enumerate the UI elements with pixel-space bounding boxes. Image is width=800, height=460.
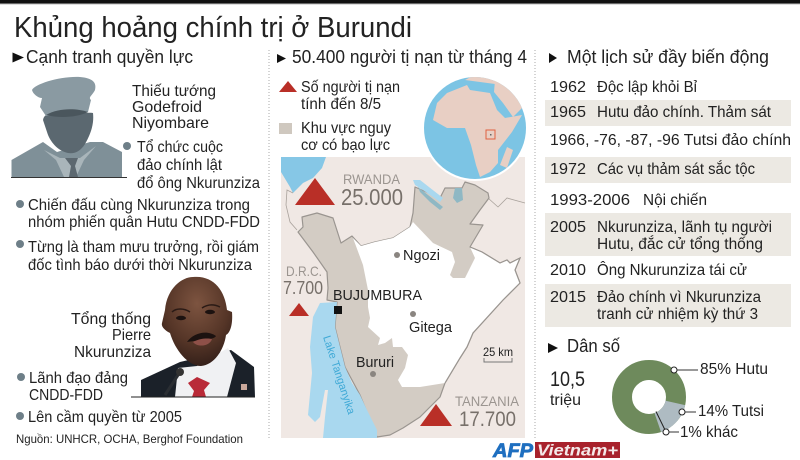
- timeline: 2005: [545, 213, 791, 256]
- timeline: 2015: [545, 284, 791, 327]
- timeline: 1993-2006: Nội chiến: [643, 192, 707, 209]
- timeline: 1993-2006: [550, 192, 707, 209]
- marker: Tanzania refugees: [420, 393, 520, 431]
- text: president name: [71, 310, 151, 361]
- text: party leader: [17, 370, 128, 404]
- text: coup organiser: đảo chính lật: [137, 157, 223, 174]
- text: party leader: CNDD-FDD: [29, 387, 103, 404]
- legend: refugee triangle: Số người tị nạn: [301, 79, 400, 96]
- text: fought with Nkurunziza: [16, 197, 260, 231]
- panel: population: [548, 335, 768, 441]
- locator globe: [422, 72, 530, 181]
- city: Bururi: Bururi: [356, 354, 394, 371]
- callout: other: 1% khác: [680, 424, 738, 441]
- timeline: 1962: [550, 79, 697, 96]
- callout: Hutu: [671, 361, 768, 378]
- city: Bujumbura: BUJUMBURA: [333, 287, 422, 304]
- text: Godefroid Niyombare name: [132, 83, 216, 132]
- photo: president Nkurunziza: [131, 277, 255, 397]
- stat: 10.5 million: [550, 368, 585, 409]
- city: Ngozi: Ngozi: [403, 247, 440, 264]
- icon: soldier silhouette: [11, 77, 127, 178]
- stat: 10.5 million: triệu: [550, 392, 581, 409]
- timeline: 2005: 2005: [550, 219, 586, 236]
- marker: DRC refugees: [283, 263, 323, 316]
- timeline: 1993-2006: 1993-2006: [550, 192, 630, 209]
- text: president name: Nkurunziza: [74, 344, 151, 361]
- timeline: 1972: Các vụ thảm sát sắc tộc: [597, 159, 755, 178]
- legend: refugee triangle: tính đến 8/5: [301, 96, 381, 113]
- text: president name: Tổng thống: [71, 310, 151, 328]
- heading: population: Dân số: [567, 335, 620, 356]
- marker: Rwanda refugees: 25.000: [341, 184, 403, 210]
- text: former chief of staff: [16, 239, 259, 274]
- legend: violence risk area: Khu vực nguy: [301, 120, 391, 137]
- timeline: 2010: [550, 260, 747, 279]
- timeline: 2015: 2015: [550, 289, 586, 306]
- text: former chief of staff: Từng là tham mưu trưởng, rồi giám: [28, 239, 259, 256]
- city: Gitega: Gitega: [409, 319, 453, 336]
- text: former chief of staff: đốc tình báo dưới thời Nkurunziza: [28, 257, 252, 274]
- title: Khủng hoảng chính trị ở Burundi: [14, 12, 412, 44]
- scale bar: 25 km: [483, 345, 513, 359]
- text: Godefroid Niyombare name: Niyombare: [132, 115, 209, 132]
- text: coup organiser: [123, 138, 260, 192]
- marker: Tanzania refugees: 17.700: [459, 408, 516, 431]
- timeline: 2010: Ông Nkurunziza tái cử: [597, 260, 747, 279]
- heading: refugees: 50.400 người tị nạn từ tháng 4: [292, 46, 527, 67]
- callout: Tutsi: 14% Tutsi: [698, 403, 764, 420]
- marker: DRC refugees: D.R.C.: [286, 263, 322, 279]
- text: president name: Pierre: [112, 327, 151, 344]
- text: Godefroid Niyombare name: Thiếu tướng: [132, 83, 216, 100]
- marker: Rwanda refugees: RWANDA: [343, 171, 401, 187]
- text: fought with Nkurunziza: nhóm phiến quân Hutu CNDD-FDD: [28, 214, 260, 231]
- timeline: 1962: Độc lập khỏi Bỉ: [597, 79, 697, 96]
- timeline: 1965: Hutu đảo chính. Thảm sát: [597, 104, 772, 121]
- text: coup organiser: Tổ chức cuộc: [137, 138, 223, 156]
- text: party leader: Lãnh đạo đảng: [29, 370, 128, 387]
- timeline: 2005: Hutu, đắc cử tổng thống: [597, 234, 763, 253]
- panel: refugees map: [277, 46, 530, 438]
- marker: Rwanda refugees: [295, 171, 403, 210]
- map: Burundi: [281, 157, 525, 438]
- timeline: 1966-96: 1966, -76, -87, -96 Tutsi đảo chính: [550, 132, 791, 149]
- heading: population: [548, 335, 620, 356]
- marker: Tanzania refugees: TANZANIA: [455, 393, 520, 409]
- callout: Hutu: 85% Hutu: [700, 361, 768, 378]
- panel: power rivalry: [11, 46, 260, 446]
- legend: refugee triangle: [279, 79, 400, 113]
- city: Gitega: [409, 311, 453, 336]
- timeline: 1965: 1965: [550, 104, 586, 121]
- text: fought with Nkurunziza: Chiến đấu cùng Nkurunziza trong: [28, 197, 250, 214]
- timeline: 2005: Nkurunziza, lãnh tụ người: [597, 219, 772, 236]
- timeline: 1972: [545, 157, 791, 183]
- marker: DRC refugees: 7.700: [283, 278, 323, 298]
- city: Bujumbura: [333, 287, 422, 314]
- timeline: 1972: 1972: [550, 161, 586, 178]
- logo: AFP Vietnam+: [492, 441, 620, 460]
- timeline: 2015: tranh cử nhiệm kỳ thứ 3: [597, 306, 758, 323]
- label: Lake Tanganyika: Lake Tanganyika: [320, 334, 357, 417]
- heading: power rivalry: Cạnh tranh quyền lực: [26, 46, 193, 67]
- legend: violence risk area: cơ có bạo lực: [301, 137, 390, 154]
- timeline: 1965: [545, 100, 791, 126]
- legend: violence risk area: [279, 120, 391, 154]
- text: in power since 2005: Lên cầm quyền từ 2005: [28, 409, 182, 426]
- text: coup organiser: đổ ông Nkurunziza: [137, 174, 260, 192]
- panel: turbulent history: [545, 46, 791, 327]
- text: Godefroid Niyombare name: Godefroid: [132, 99, 202, 116]
- logo: AFP Vietnam+: Vietnam+: [537, 442, 618, 460]
- timeline: 1962: 1962: [550, 79, 586, 96]
- timeline: 2015: Đảo chính vì Nkurunziza: [597, 289, 761, 306]
- source: Nguồn: UNHCR, OCHA, Berghof Foundation: [16, 432, 243, 446]
- stat: 10.5 million: 10,5: [550, 368, 585, 391]
- donut chart: [622, 361, 768, 441]
- timeline: 2010: 2010: [550, 262, 586, 279]
- heading: history: Một lịch sử đầy biến động: [567, 46, 769, 67]
